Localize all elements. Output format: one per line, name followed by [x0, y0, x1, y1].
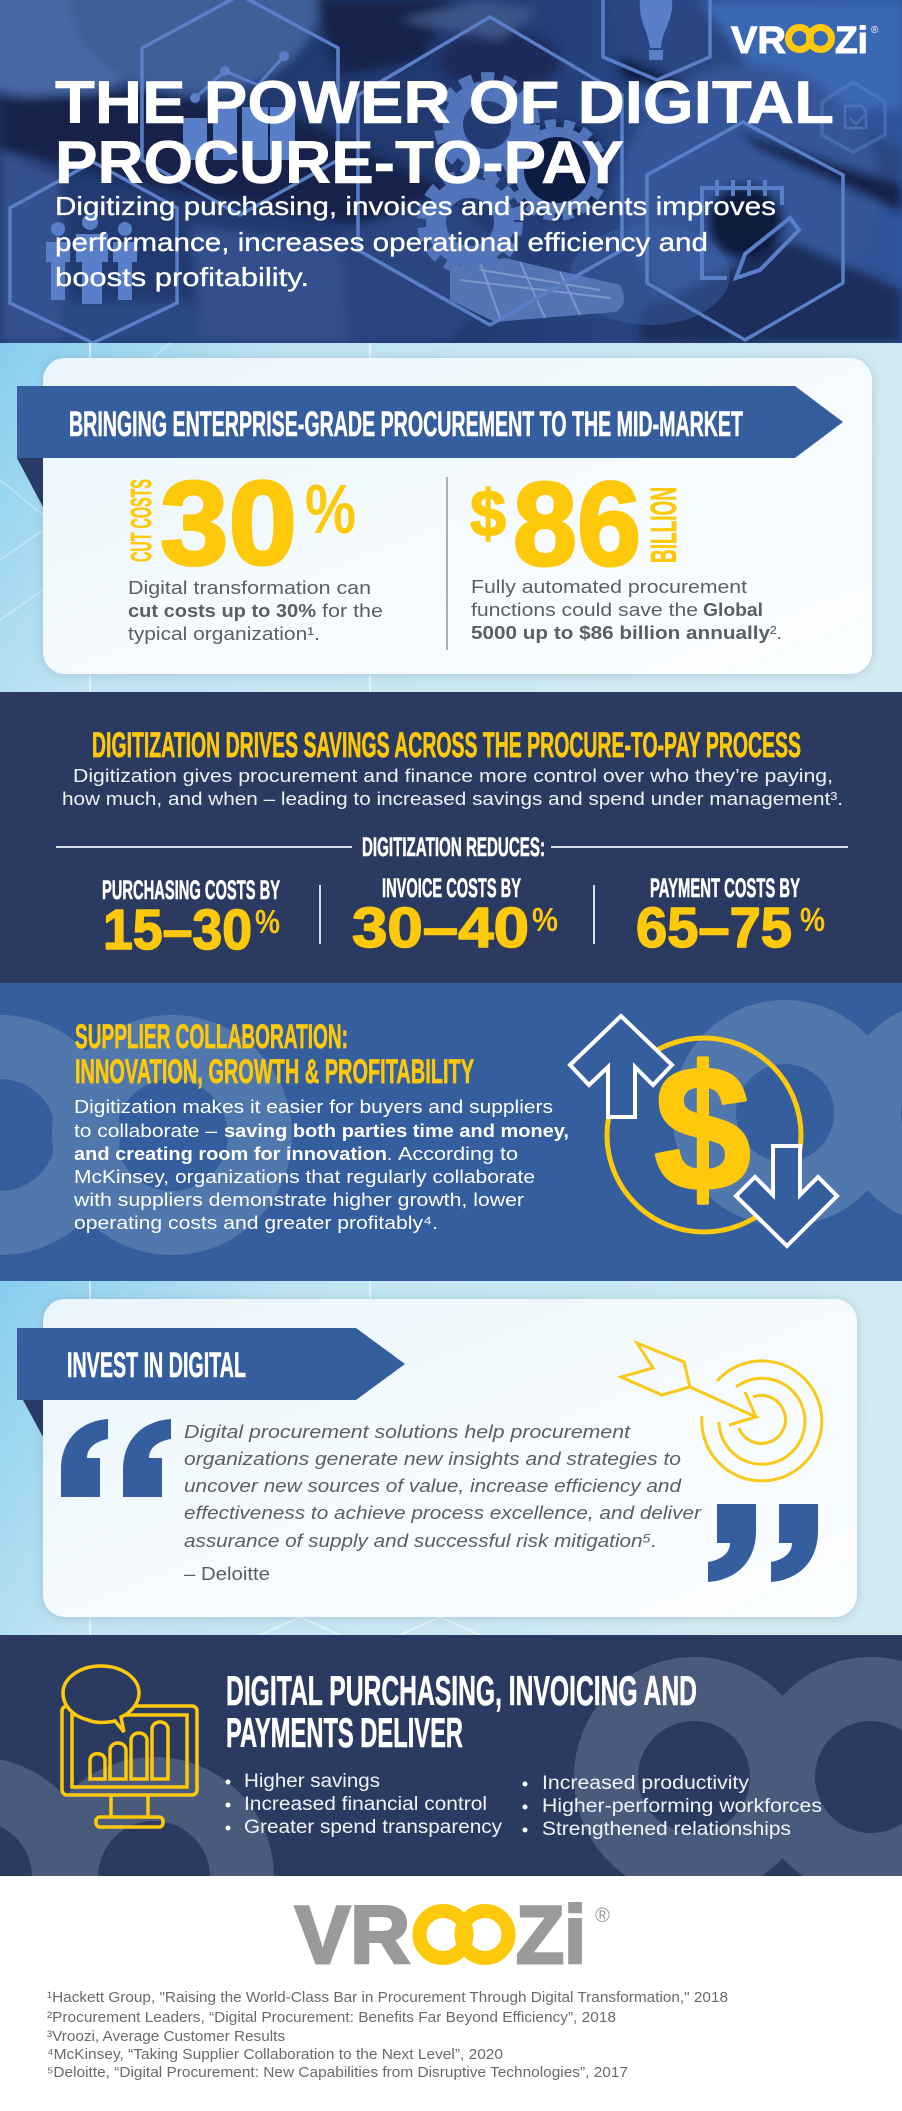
stat: invoice costs: % [532, 901, 558, 938]
stat: cut costs 30%: CUT COSTS [126, 479, 158, 562]
text: supplier collaboration body: operating costs and greater profitably⁴. [74, 1212, 438, 1233]
panel: digitization savings [0, 692, 902, 983]
stat: invoice costs: 30–40 [352, 896, 529, 960]
text: supplier collaboration body: to collaborate – [74, 1120, 218, 1141]
text: digitization description [62, 765, 843, 809]
subtitle: performance, increases operational efficiency and [55, 227, 708, 257]
stat: purchasing costs: % [255, 903, 280, 940]
subtitle: boosts profitability. [55, 262, 309, 292]
list: benefits right: Higher-performing workforces [542, 1796, 822, 1817]
logo: Vroozi footer: VR [295, 1890, 410, 1981]
heading: digital purchasing [227, 1676, 696, 1748]
text: $86 billion description: functions could save the [471, 599, 698, 620]
heading: digitization reduces: DIGITIZATION REDUCES: [362, 832, 545, 862]
stat: purchasing costs: PURCHASING COSTS BY [102, 875, 280, 905]
text: supplier collaboration body [73, 1096, 569, 1233]
stat: purchasing costs [102, 875, 280, 962]
icon: gears [422, 77, 604, 270]
text: supplier collaboration body: According to [398, 1143, 518, 1164]
title: PROCURE-TO-PAY [55, 129, 624, 196]
text: $86 billion description [471, 576, 782, 643]
icon: dollar with up and down arrows: $ [654, 1029, 751, 1228]
banner: invest in digital [17, 1328, 405, 1437]
stat: invoice costs: INVOICE COSTS BY [382, 873, 521, 903]
text: footnotes: ²Procurement Leaders, “Digital Procurement: Benefits Far Beyond Efficiency”, 2018 [47, 2009, 616, 2026]
text: attribution: – Deloitte [184, 1563, 270, 1584]
logo: Vroozi header: ® [871, 25, 879, 36]
subtitle: Digitizing purchasing, invoices and payments improves [55, 191, 776, 221]
text: footnotes: ³Vroozi, Average Customer Results [47, 2028, 285, 2045]
title [55, 80, 832, 184]
icon: target and arrow [621, 1343, 822, 1481]
title: THE POWER OF DIGITAL [55, 69, 834, 136]
list: benefits right [522, 1773, 822, 1840]
text: cut costs description: for the [322, 600, 383, 621]
text: quote: organizations generate new insights and strategies to [184, 1448, 681, 1469]
text: quote: effectiveness to achieve process excellence, and deliver [184, 1502, 702, 1523]
text: supplier collaboration body: McKinsey, organizations that regularly collaborate [74, 1166, 535, 1187]
stat: $86 billion: 86 [513, 458, 641, 591]
icon: opening quote [61, 1419, 171, 1497]
heading: supplier collaboration [75, 1024, 474, 1089]
panel: mid-market card [17, 358, 872, 674]
stat: $86 billion: $ [470, 476, 506, 550]
text: cut costs description: cut costs up to 30% [128, 600, 316, 621]
panel: invest in digital card [17, 1299, 857, 1617]
logo: Vroozi header: Zi [835, 20, 868, 62]
banner: mid-market heading [17, 386, 843, 507]
list: benefits left: Higher savings [244, 1771, 380, 1792]
stat: payment costs: % [800, 901, 825, 938]
panel: header banner [0, 0, 902, 343]
logo: Vroozi footer: Zi [516, 1890, 586, 1981]
stat: $86 billion [470, 458, 684, 591]
list: benefits left: Increased financial control [244, 1794, 487, 1815]
stat: payment costs [636, 873, 825, 960]
text: footnotes: ⁵Deloitte, “Digital Procurement: New Capabilities from Disruptive Technologies”, 2017 [47, 2064, 628, 2081]
stat: purchasing costs: 15–30 [103, 898, 252, 962]
logo: Vroozi header: VR [731, 20, 786, 62]
text: quote: Digital procurement solutions help procurement [184, 1421, 631, 1442]
icon: dollar with up and down arrows [570, 1016, 837, 1246]
icon: notepad and pencil [702, 180, 799, 278]
heading: supplier collaboration: INNOVATION, GROWTH & PROFITABILITY [75, 1053, 474, 1091]
banner: invest in digital: INVEST IN DIGITAL [67, 1346, 246, 1385]
text: supplier collaboration body: and creating room for innovation [74, 1143, 387, 1164]
panel: mid-market background [0, 343, 902, 692]
text: supplier collaboration body: with suppliers demonstrate higher growth, lower [73, 1189, 524, 1210]
stat: invoice costs [352, 873, 558, 960]
stat: cut costs 30% [126, 457, 356, 590]
text: footnotes: ¹Hackett Group, "Raising the World-Class Bar in Procurement Through Digital Transformation," 2018 [47, 1989, 728, 2006]
hexagon outlines [10, 0, 885, 343]
text: digitization description: how much, and when – leading to increased savings and spend under management³. [62, 788, 843, 809]
panel: footer [0, 1876, 902, 2111]
text: supplier collaboration body: saving both parties time and money, [224, 1120, 569, 1141]
text: cut costs description: typical organization¹. [128, 623, 320, 644]
logo: Vroozi footer [295, 1890, 610, 1981]
stat: payment costs: 65–75 [636, 896, 792, 960]
text: quote: assurance of supply and successful risk mitigation⁵. [184, 1530, 657, 1551]
list: benefits left [226, 1771, 503, 1838]
text: cut costs description [128, 577, 383, 644]
stat: cut costs 30%: % [305, 470, 356, 548]
panel: supplier collaboration [0, 983, 902, 1281]
text: footnotes [47, 1989, 728, 2081]
text: $86 billion description: ². [770, 622, 782, 643]
text: $86 billion description: Fully automated procurement [471, 576, 747, 597]
logo: Vroozi header [730, 24, 878, 54]
text: footnotes: ⁴McKinsey, “Taking Supplier Collaboration to the Next Level”, 2020 [47, 2046, 503, 2063]
subtitle [55, 191, 776, 292]
text: supplier collaboration body: . [387, 1143, 392, 1164]
heading: supplier collaboration: SUPPLIER COLLABORATION: [75, 1018, 348, 1056]
heading: digital purchasing: PAYMENTS DELIVER [226, 1709, 463, 1756]
icon: light bulb [640, 0, 672, 60]
icon: monitor with chart and speech bubble [62, 1666, 197, 1827]
text: $86 billion description: Global [703, 599, 763, 620]
text: quote: uncover new sources of value, increase efficiency and [184, 1475, 682, 1496]
text: $86 billion description: 5000 up to $86 billion annually [471, 622, 771, 643]
keyboard [450, 258, 624, 322]
icon: team of people [46, 214, 137, 304]
stat: $86 billion: BILLION [643, 487, 684, 563]
panel: invest background [0, 1281, 902, 1635]
text: cut costs description: Digital transformation can [128, 577, 371, 598]
stat: cut costs 30%: 30 [160, 457, 297, 590]
list: benefits right: Strengthened relationships [542, 1819, 791, 1840]
list: benefits left: Greater spend transparency [244, 1817, 503, 1838]
text: supplier collaboration body: Digitization makes it easier for buyers and suppliers [74, 1096, 553, 1117]
text: quote [184, 1421, 702, 1551]
icon: closing quote [708, 1504, 818, 1582]
photo background [0, 0, 902, 343]
list: benefits right: Increased productivity [542, 1773, 750, 1794]
logo: Vroozi footer: ® [595, 1905, 610, 1927]
panel: digital purchasing benefits [0, 1635, 902, 1876]
text: digitization description: Digitization gives procurement and finance more control over who they’re paying, [73, 765, 833, 786]
icon: line and bar chart [183, 51, 295, 160]
icon: checklist [845, 106, 866, 128]
